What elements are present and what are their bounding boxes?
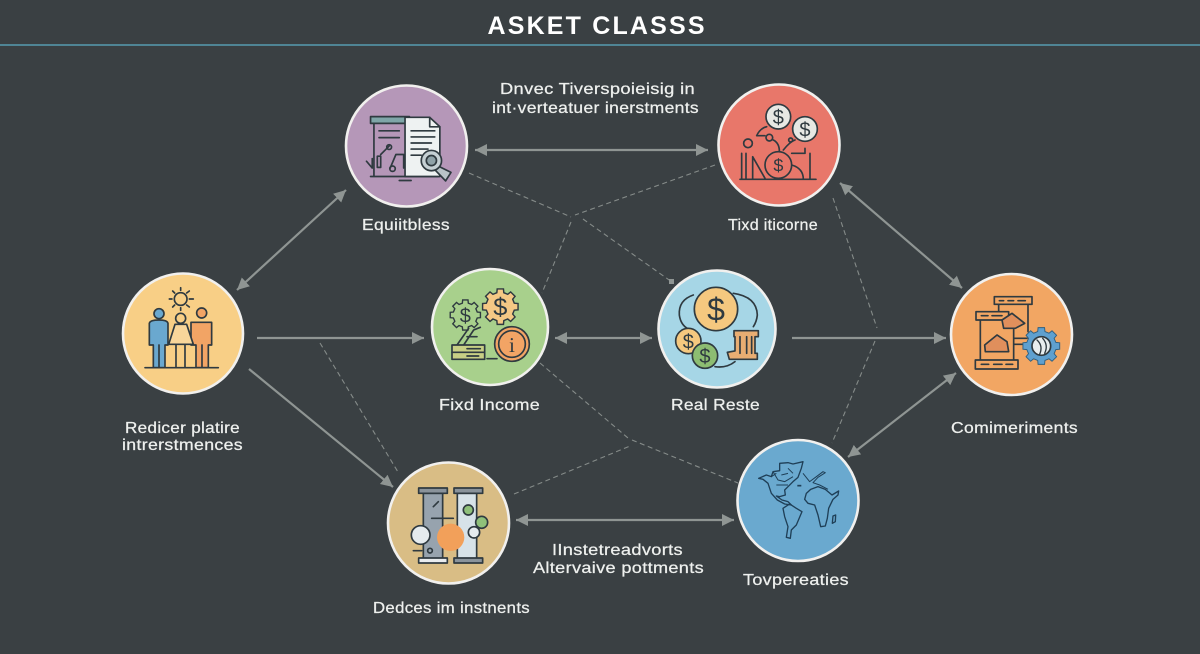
- arrow: people to equities: [237, 190, 346, 290]
- caption: top centre: Dnvec Tiverspoieisig in: [500, 81, 695, 98]
- caption: top centre: [492, 81, 699, 117]
- label: people: intrerstmences: [122, 437, 243, 454]
- icon: coins and network: $: [773, 107, 784, 129]
- icon: gears and coin: i: [509, 333, 515, 357]
- icon: gears and coin: $: [460, 305, 471, 327]
- title: ASKET CLASSS: [488, 12, 704, 40]
- arrow: people to fixed income: [257, 337, 424, 339]
- arrow: real estate to commodities: [792, 337, 946, 339]
- caption: top centre: int·verteatuer inerstments: [492, 100, 699, 117]
- icon: coins and columns: $: [683, 331, 694, 353]
- node: fixed income: [432, 269, 548, 385]
- node: top right income: [718, 84, 840, 206]
- label: commodities: Comimeriments: [951, 420, 1078, 437]
- label: real estate: Real Reste: [671, 397, 760, 414]
- node: world: [738, 440, 858, 561]
- caption: bottom centre: [533, 542, 704, 577]
- arrow: equities to fixed income top: [475, 149, 708, 151]
- node: equities: [346, 86, 467, 206]
- arrow: derivatives to world: [516, 519, 734, 521]
- icon: coins and columns: [676, 287, 758, 368]
- arrow: top right to commodities: [840, 183, 962, 288]
- label: people: Redicer platire: [125, 420, 240, 437]
- node: derivatives: [388, 462, 509, 584]
- label: world: Tovpereaties: [743, 572, 849, 589]
- label: people: [122, 420, 243, 454]
- icon: document and magnifier: [367, 117, 451, 181]
- icon: coins and network: $: [773, 156, 783, 176]
- icon: world map: [759, 462, 839, 538]
- icon: coins and columns: $: [707, 291, 725, 327]
- icon: coins and network: [740, 104, 817, 179]
- icon: columns and bubbles: [411, 488, 488, 563]
- icon: gears and coin: [450, 289, 529, 361]
- caption: bottom centre: Altervaive pottments: [533, 560, 704, 577]
- arrow: fixed income to real estate: [555, 337, 652, 339]
- arrow: people to derivatives: [249, 369, 393, 487]
- icon: coins and network: $: [799, 119, 811, 141]
- label: equities: Equiitbless: [362, 217, 450, 234]
- dashed connectors: [320, 165, 877, 494]
- arrow: world to commodities: [848, 373, 956, 457]
- node: real estate: [658, 270, 776, 388]
- icon: coins and columns: $: [699, 346, 711, 368]
- label: top right income: Tixd iticorne: [728, 217, 818, 234]
- label: fixed income: Fixd Income: [439, 397, 540, 414]
- caption: bottom centre: IInstetreadvorts: [552, 542, 683, 559]
- icon: gears and coin: $: [493, 294, 507, 322]
- icon: three people and sun: [145, 288, 218, 368]
- label: derivatives: Dedces im instnents: [373, 600, 530, 617]
- icon: containers and gear: [975, 297, 1060, 369]
- node: people: [123, 274, 243, 394]
- node: commodities: [951, 274, 1072, 395]
